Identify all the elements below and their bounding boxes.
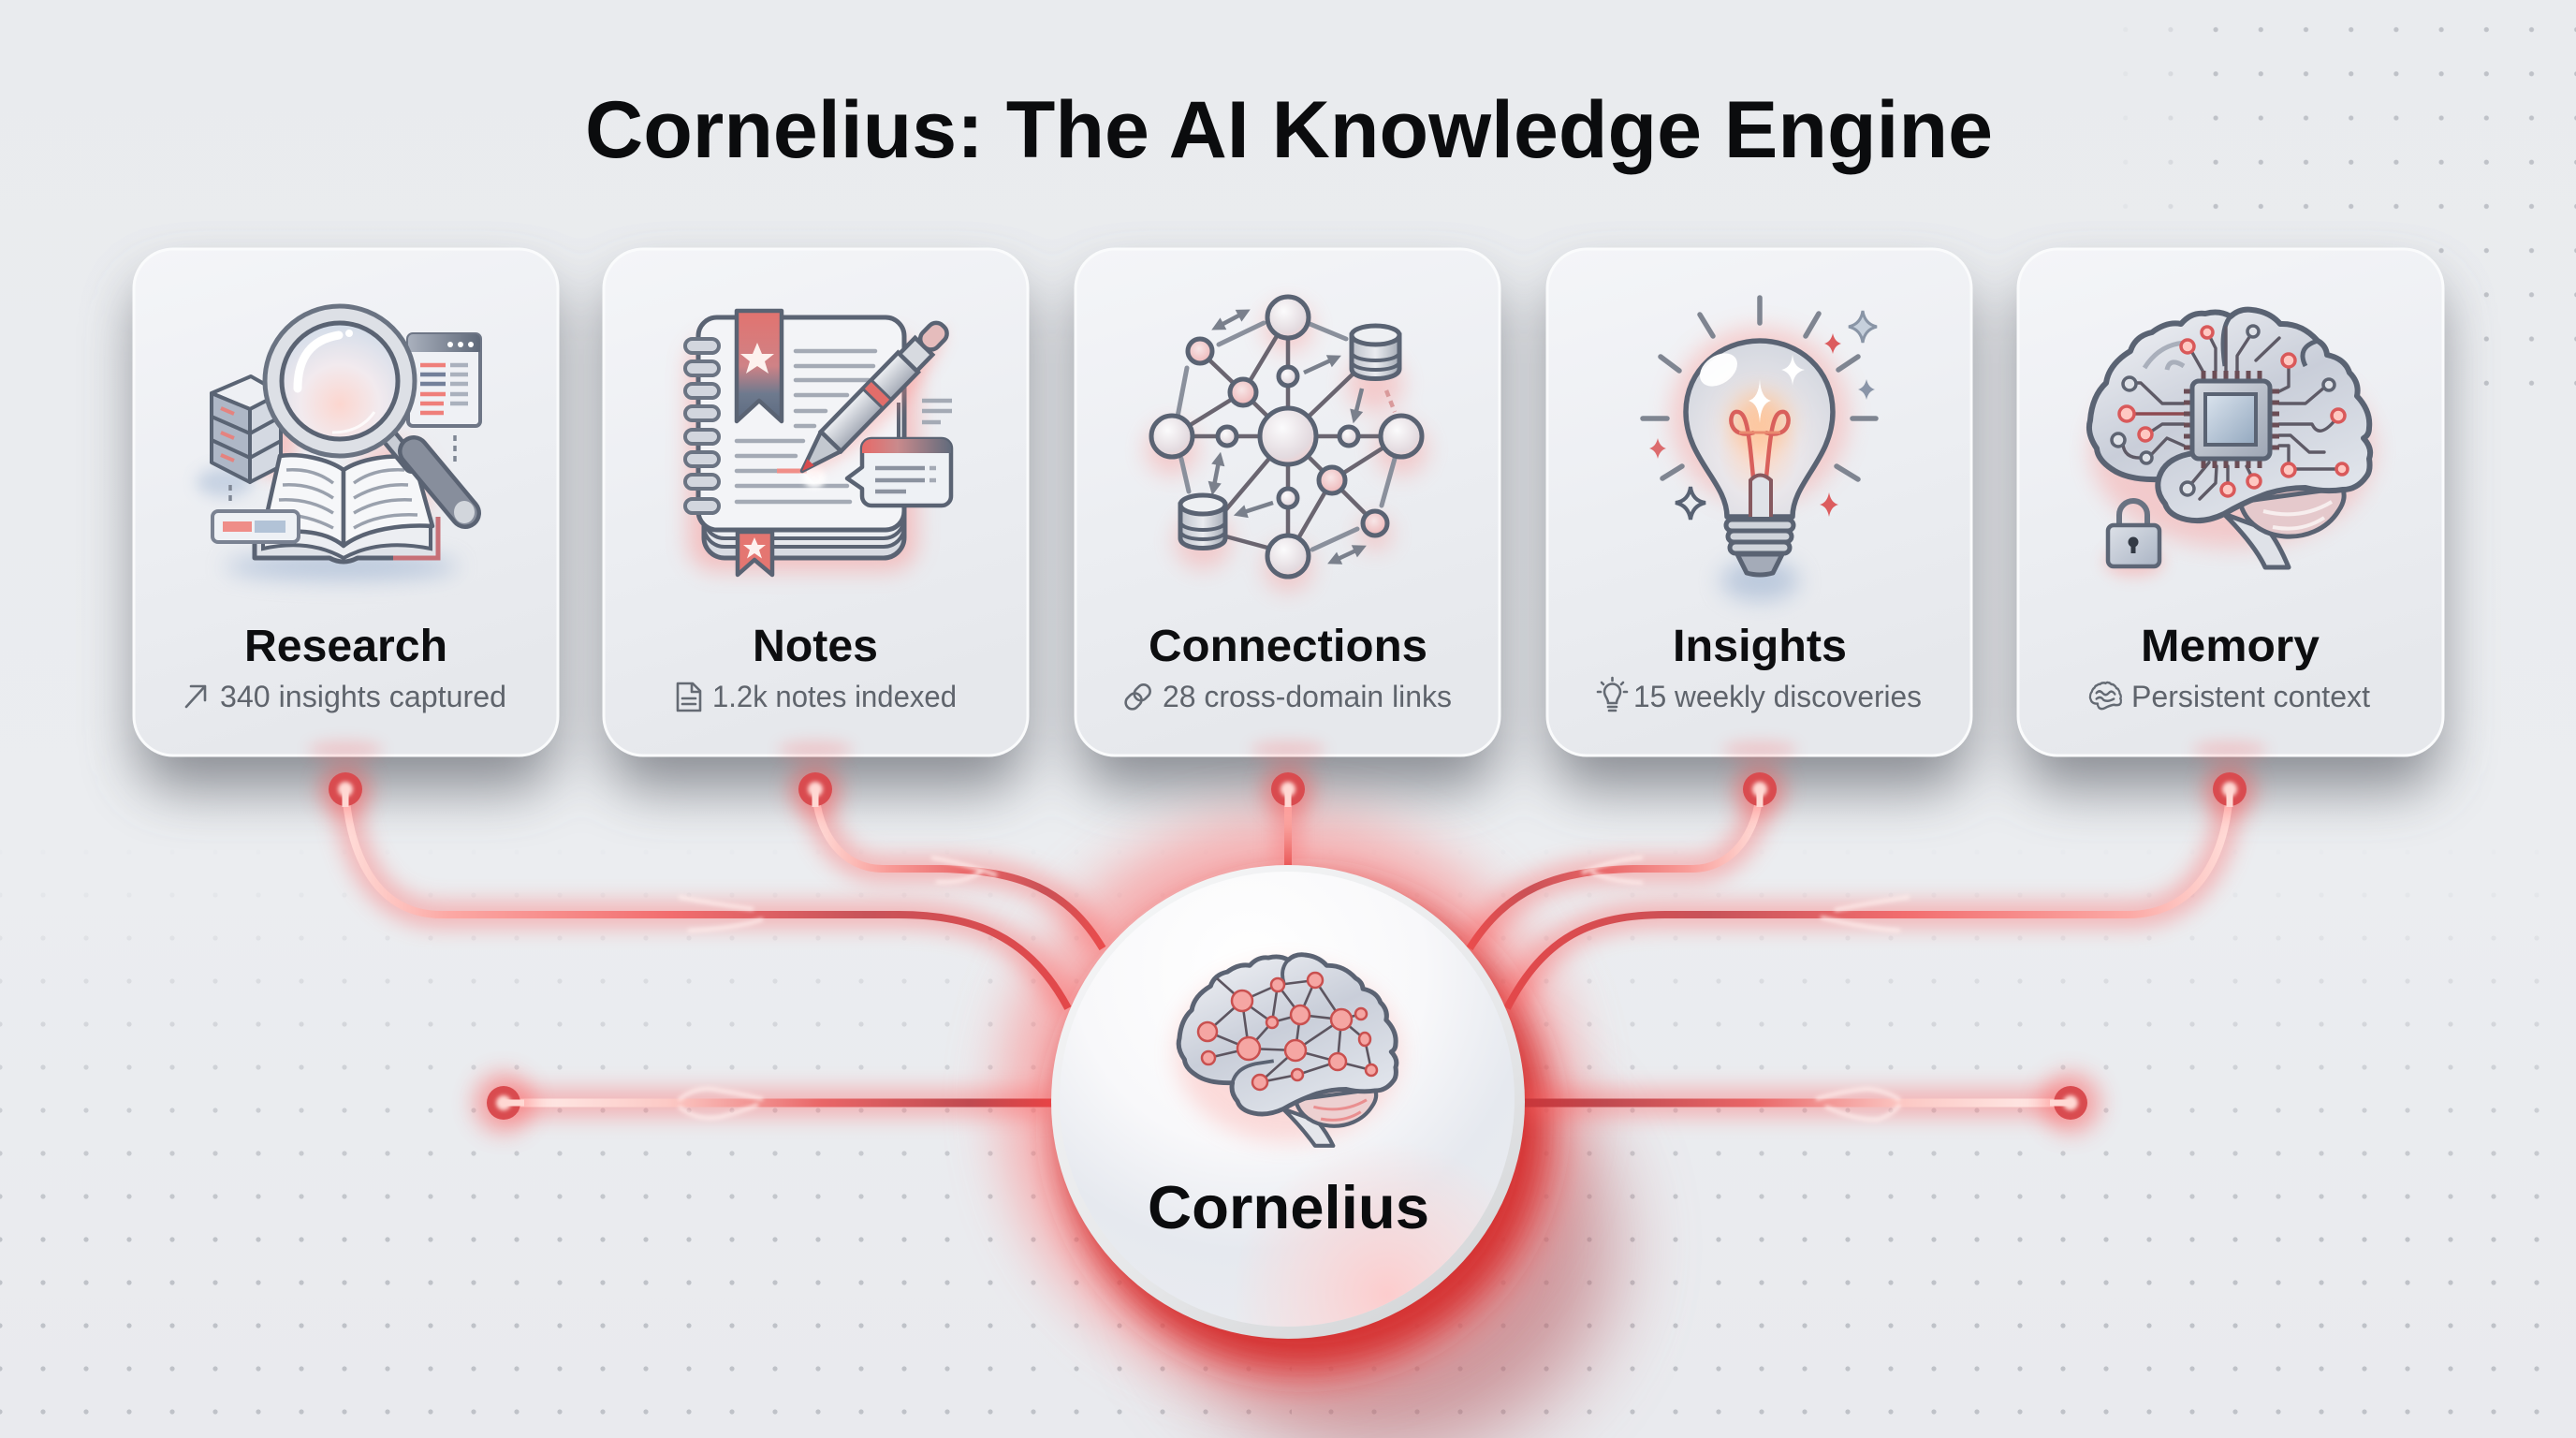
tag	[212, 511, 299, 542]
bulb stem	[1750, 476, 1771, 517]
connector: Research to hub	[345, 789, 1068, 1008]
bookmark	[737, 311, 782, 421]
icon: brain with chip and lock	[2089, 310, 2375, 577]
hub glow and shadow	[1003, 816, 1615, 1438]
connector endpoints	[320, 764, 2255, 1133]
spiral	[685, 339, 719, 513]
connector: Notes to hub	[815, 789, 1103, 948]
icon: neural brain	[1176, 955, 1400, 1146]
hub label: Cornelius	[1148, 1173, 1429, 1241]
icon: light bulb	[1643, 298, 1877, 601]
data cubes	[212, 376, 281, 482]
label: Insights: Insights	[1673, 622, 1847, 671]
open book	[255, 455, 438, 562]
panel: Insights	[1547, 249, 1971, 758]
circuit traces	[2112, 326, 2348, 499]
stat: Connections: 28 cross-domain links	[1163, 680, 1452, 713]
sparkles	[1649, 311, 1877, 520]
chip	[2184, 371, 2279, 468]
bottom ribbon	[738, 532, 772, 575]
icon: magnifier over open book	[197, 306, 480, 580]
database top right	[1352, 326, 1399, 378]
panel: Research	[134, 249, 558, 758]
arrows	[1213, 312, 1362, 562]
brain outline	[2089, 310, 2370, 567]
title: Cornelius: The AI Knowledge Engine	[585, 85, 1993, 175]
panel: Memory	[2018, 249, 2443, 758]
hub: Cornelius	[1051, 865, 1525, 1339]
label: Connections: Connections	[1149, 622, 1427, 671]
icon: knowledge network	[1146, 297, 1427, 592]
rays	[1643, 298, 1876, 479]
magnifier	[265, 306, 475, 523]
notebook	[698, 317, 904, 558]
network nodes	[1151, 297, 1422, 577]
pen	[784, 309, 960, 488]
icon: notebook and pen	[685, 309, 960, 575]
connector: right stub to hub	[1524, 1089, 2071, 1120]
browser window	[408, 334, 480, 426]
glass bulb	[1686, 341, 1833, 517]
screw base	[1726, 520, 1793, 575]
network links	[1172, 317, 1401, 556]
connector: Memory to hub	[1507, 789, 2230, 1008]
stat: Insights: 15 weekly discoveries	[1633, 680, 1922, 713]
database bottom left	[1180, 495, 1225, 549]
filament	[1731, 412, 1789, 477]
stat: Notes: 1.2k notes indexed	[712, 680, 957, 713]
padlock	[2108, 501, 2159, 566]
label: Research: Research	[244, 622, 447, 671]
speech bubble	[847, 439, 951, 506]
stat: Memory: Persistent context	[2131, 680, 2370, 713]
label: Memory: Memory	[2141, 622, 2320, 671]
connector: Insights to hub	[1470, 789, 1760, 948]
connector: left stub to hub	[504, 1089, 1052, 1118]
panel: Connections	[1076, 249, 1500, 758]
panel: Notes	[604, 249, 1028, 758]
connector: Connections to hub	[1276, 789, 1300, 865]
stat: Research: 340 insights captured	[220, 680, 506, 713]
label: Notes: Notes	[753, 622, 878, 671]
